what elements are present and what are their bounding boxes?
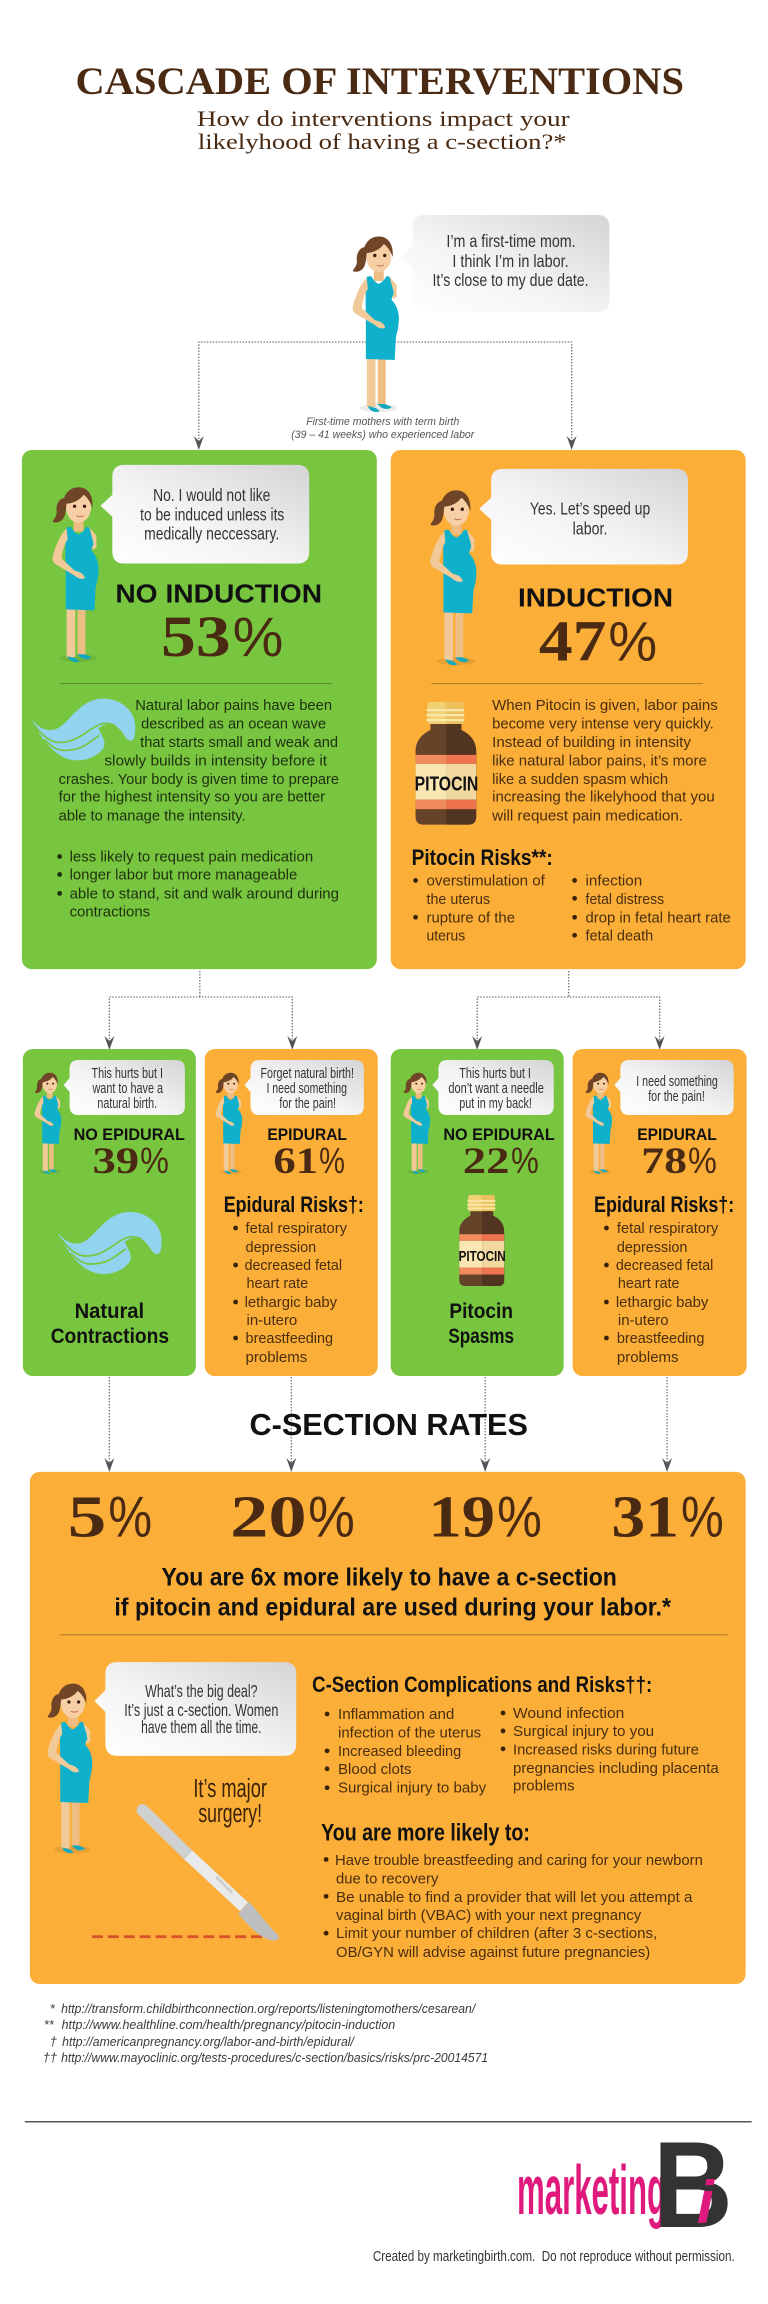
- list: more likely: vaginal birth (VBAC) with your next pregnancy: [336, 1908, 642, 1924]
- speech bubble: first-time mom: It’s close to my due date.: [432, 270, 589, 290]
- key message: You are 6x more likely to have a c-section: [162, 1563, 617, 1591]
- list: no induction benefits: able to stand, sit and walk around during: [70, 886, 339, 902]
- list: epidural risks: Epidural Risks†:: [594, 1192, 734, 1217]
- list: pitocin risks: [413, 873, 731, 945]
- list: more likely: Limit your number of children (after 3 c-sections,: [336, 1926, 657, 1942]
- speech bubble: Forget natural birth!: [260, 1065, 354, 1082]
- woman: [47, 1684, 92, 1853]
- stat: 39%: 39: [92, 1140, 139, 1181]
- woman: no induction: [52, 487, 99, 662]
- list: epidural risks: lethargic baby: [616, 1295, 709, 1311]
- text: natural labor: for the highest intensity so you are better: [59, 790, 325, 806]
- arrows: induction to epidural panels: [472, 971, 665, 1050]
- stat: 31%: %: [681, 1486, 724, 1550]
- speech bubble: first-time mom: I’m a first-time mom.: [446, 231, 576, 251]
- icon: pitocin bottle: [415, 702, 478, 825]
- list: more likely: Have trouble breastfeeding and caring for your newborn: [335, 1853, 703, 1869]
- panel: epidural, pitocin: [573, 1049, 747, 1376]
- stat: 5%: [68, 1484, 152, 1550]
- panel: induction: [391, 450, 746, 969]
- speech bubble: This hurts but I: [459, 1065, 531, 1082]
- list: more likely: OB/GYN will advise against future pregnancies): [336, 1945, 650, 1961]
- speech bubble: natural birth.: [97, 1095, 157, 1112]
- text: natural labor: Natural labor pains have been: [135, 698, 332, 714]
- list: epidural risks: breastfeeding: [617, 1331, 704, 1347]
- footnotes: ††: [43, 2050, 58, 2065]
- woman: [403, 1073, 430, 1174]
- heading: pitocin risks: Pitocin Risks**:: [412, 845, 553, 870]
- stat: 20%: [230, 1484, 355, 1550]
- list: complications right: pregnancies including placenta: [513, 1761, 720, 1777]
- footnotes: http://www.healthline.com/health/pregnancy/pitocin-induction: [62, 2017, 395, 2032]
- list: epidural risks: breastfeeding: [246, 1331, 333, 1347]
- text: natural labor: that starts small and weak and: [140, 735, 338, 751]
- list: epidural risks: decreased fetal: [245, 1258, 342, 1274]
- list: no induction benefits: longer labor but more manageable: [70, 867, 297, 883]
- speech bubble: I need something: [266, 1080, 347, 1097]
- stat: 61%: %: [319, 1141, 345, 1181]
- footnotes: †: [50, 2034, 58, 2049]
- caption: (39 – 41 weeks) who experienced labor: [291, 429, 476, 441]
- stat: 78%: [641, 1140, 717, 1181]
- list: more likely: [324, 1853, 703, 1961]
- woman: [216, 1073, 242, 1174]
- list: epidural risks: decreased fetal: [616, 1258, 713, 1274]
- stat: 31%: 31: [611, 1484, 679, 1550]
- speech bubble: [432, 1060, 554, 1115]
- list: complications right: Wound infection: [513, 1706, 624, 1722]
- speech bubble: no induction: [100, 465, 309, 564]
- list: epidural risks: problems: [246, 1350, 307, 1366]
- panel: c-section outcomes: [30, 1472, 746, 1984]
- text: natural labor: slowly builds in intensity before it: [104, 753, 327, 769]
- list: complications left: Blood clots: [338, 1762, 412, 1778]
- list: pitocin risks: uterus: [427, 929, 465, 945]
- list: epidural risks: problems: [617, 1350, 679, 1366]
- stat: 47%: 47: [539, 611, 606, 674]
- list: pitocin risks: fetal death: [586, 929, 653, 945]
- speech bubble: for the pain!: [648, 1088, 705, 1105]
- text: pitocin: become very intense very quickly.: [492, 717, 714, 733]
- list: epidural risks: fetal respiratory: [246, 1221, 348, 1237]
- icon: wave: [58, 1212, 162, 1274]
- callout: major surgery: [193, 1775, 267, 1828]
- panel: no induction: [22, 450, 377, 969]
- stat: 19%: %: [497, 1486, 542, 1550]
- heading: induction: INDUCTION: [518, 584, 673, 612]
- text: pitocin: increasing the likelyhood that you: [492, 790, 715, 806]
- speech bubble: for the pain!: [279, 1095, 336, 1112]
- list: pitocin risks: infection: [586, 873, 642, 889]
- stat: 78%: 78: [641, 1140, 687, 1181]
- label: EPIDURAL: [267, 1126, 347, 1144]
- footnotes: [43, 2001, 488, 2065]
- list: complications right: problems: [513, 1779, 575, 1795]
- list: epidural risks: fetal respiratory: [617, 1221, 719, 1237]
- list: complications left: Surgical injury to baby: [338, 1781, 487, 1797]
- callout: major surgery: It’s major: [193, 1775, 267, 1803]
- stat: 5%: 5: [68, 1484, 106, 1550]
- speech bubble: induction: [479, 469, 688, 565]
- footnotes: http://transform.childbirthconnection.org/reports/listeningtomothers/cesarean/: [61, 2001, 477, 2016]
- list: epidural risks: in-utero: [618, 1313, 669, 1329]
- logo: marketingBi: i: [697, 2169, 715, 2236]
- stat: 19%: [428, 1484, 542, 1550]
- text: pitocin: When Pitocin is given, labor pains: [492, 698, 718, 714]
- speech bubble: first-time mom: [401, 215, 609, 312]
- caption: pitocin spasms: Spasms: [448, 1325, 514, 1348]
- stat: 31%: [611, 1484, 724, 1550]
- text: pitocin: [491, 698, 718, 825]
- icon: pitocin bottle: PITOCIN: [459, 1249, 506, 1265]
- list: pitocin risks: fetal distress: [586, 892, 664, 908]
- list: more likely: Be unable to find a provider that will let you attempt a: [336, 1890, 693, 1906]
- list: epidural risks: depression: [617, 1240, 687, 1256]
- stat: 53%: %: [233, 606, 283, 668]
- list: pitocin risks: rupture of the: [427, 910, 515, 926]
- arrows: no induction to epidural panels: [104, 971, 297, 1050]
- stat: 47%: %: [608, 611, 657, 673]
- stat: 20%: 20: [230, 1484, 307, 1550]
- speech bubble: induction: Yes. Let’s speed up: [530, 499, 650, 519]
- speech bubble: have them all the time.: [141, 1717, 261, 1737]
- list: complications right: Surgical injury to you: [513, 1724, 654, 1740]
- panel: no epidural, natural: [23, 1049, 196, 1376]
- stat: 5%: %: [108, 1486, 152, 1550]
- woman: [35, 1073, 61, 1174]
- text: pitocin: like natural labor pains, it’s more: [492, 753, 707, 769]
- icon: pitocin bottle: [459, 1195, 506, 1286]
- list: complications left: infection of the uterus: [338, 1725, 481, 1742]
- speech bubble: no induction: medically neccessary.: [144, 524, 279, 544]
- callout: major surgery: surgery!: [198, 1800, 262, 1828]
- footnotes: http://americanpregnancy.org/labor-and-birth/epidural/: [62, 2034, 355, 2049]
- list: no induction benefits: contractions: [70, 904, 150, 920]
- list: pitocin risks: drop in fetal heart rate: [586, 910, 731, 926]
- list: complications left: [325, 1707, 487, 1797]
- caption: pitocin spasms: [448, 1300, 514, 1348]
- footnotes: **: [44, 2017, 55, 2032]
- stat: 61%: [273, 1140, 345, 1181]
- speech bubble: [64, 1060, 185, 1115]
- stat: 47%: [539, 611, 657, 674]
- caption: natural contractions: Contractions: [51, 1325, 169, 1348]
- heading: c-section rates: C-SECTION RATES: [250, 1407, 528, 1442]
- icon: pitocin bottle: PITOCIN: [415, 774, 478, 796]
- speech bubble: What’s the big deal?: [145, 1681, 258, 1701]
- list: epidural risks: [594, 1192, 734, 1366]
- panel: no epidural, pitocin: [391, 1049, 564, 1376]
- list: more likely: due to recovery: [336, 1871, 439, 1887]
- speech bubble: don’t want a needle: [448, 1080, 544, 1097]
- speech bubble: want to have a: [92, 1080, 164, 1097]
- stat: 53%: [161, 606, 283, 669]
- subtitle: [197, 106, 571, 154]
- top branching arrows: [194, 342, 577, 450]
- heading: complications: C-Section Complications and Risks††:: [312, 1672, 652, 1697]
- icon: scalpel and incision: [92, 1810, 279, 1941]
- stat: 53%: 53: [161, 606, 231, 669]
- stat: 78%: %: [688, 1141, 717, 1181]
- speech bubble: put in my back!: [459, 1095, 532, 1112]
- text: natural labor: [59, 698, 339, 825]
- text: pitocin: Instead of building in intensity: [492, 735, 692, 751]
- stat: 19%: 19: [428, 1484, 495, 1550]
- list: complications right: Increased risks during future: [513, 1742, 699, 1758]
- heading: no induction: NO INDUCTION: [115, 580, 322, 608]
- speech bubble: I need something: [636, 1073, 718, 1090]
- label: NO EPIDURAL: [74, 1126, 185, 1144]
- caption: [291, 416, 476, 441]
- speech bubble: This hurts but I: [91, 1065, 163, 1082]
- caption: First-time mothers with term birth: [306, 416, 459, 428]
- stat: 22%: %: [511, 1141, 539, 1181]
- list: epidural risks: [224, 1192, 364, 1366]
- speech bubble: induction: labor.: [573, 519, 607, 539]
- list: complications left: Inflammation and: [338, 1707, 454, 1723]
- list: epidural risks: heart rate: [247, 1276, 308, 1292]
- woman: induction: [430, 490, 476, 665]
- list: complications left: Increased bleeding: [338, 1744, 461, 1760]
- label: EPIDURAL: [637, 1126, 717, 1144]
- panel: epidural, natural: [205, 1049, 378, 1376]
- stat: 39%: [92, 1140, 169, 1181]
- subtitle: How do interventions impact your: [197, 106, 571, 131]
- first-time mom figure: [353, 236, 399, 412]
- footnotes: *: [50, 2001, 56, 2016]
- list: no induction benefits: [57, 849, 339, 920]
- list: pitocin risks: the uterus: [427, 892, 490, 908]
- caption: natural contractions: [51, 1300, 169, 1348]
- icon: ocean wave: [32, 699, 135, 760]
- text: natural labor: described as an ocean wave: [141, 717, 326, 733]
- list: epidural risks: depression: [246, 1240, 316, 1256]
- caption: natural contractions: Natural: [75, 1300, 144, 1323]
- logo: marketingBi: B: [653, 2116, 733, 2253]
- list: epidural risks: heart rate: [618, 1276, 680, 1292]
- list: pitocin risks: overstimulation of: [427, 873, 546, 889]
- text: natural labor: crashes. Your body is given time to prepare: [59, 772, 339, 788]
- key message: if pitocin and epidural are used during your labor.*: [114, 1593, 671, 1621]
- speech bubble: [94, 1662, 296, 1756]
- label: NO EPIDURAL: [443, 1126, 555, 1144]
- woman: [585, 1073, 612, 1174]
- speech bubble: first-time mom: I think I’m in labor.: [452, 251, 569, 271]
- stat: 61%: 61: [273, 1140, 318, 1181]
- list: epidural risks: lethargic baby: [245, 1295, 338, 1311]
- stat: 39%: %: [140, 1141, 169, 1181]
- key message: [114, 1563, 671, 1621]
- title: CASCADE OF INTERVENTIONS: [76, 60, 684, 103]
- speech bubble: no induction: to be induced unless its: [140, 505, 284, 525]
- speech bubble: [614, 1060, 734, 1115]
- list: epidural risks: Epidural Risks†:: [224, 1192, 364, 1217]
- list: complications right: [501, 1706, 720, 1795]
- speech bubble: It’s just a c-section. Women: [124, 1700, 278, 1720]
- arrows: down to c-section rates: [104, 1377, 672, 1472]
- caption: pitocin spasms: Pitocin: [449, 1300, 513, 1323]
- stat: 22%: 22: [463, 1140, 510, 1181]
- heading: more likely: You are more likely to:: [321, 1820, 530, 1847]
- stat: 20%: %: [308, 1486, 355, 1550]
- list: epidural risks: in-utero: [247, 1313, 297, 1329]
- speech bubble: [245, 1060, 364, 1115]
- subtitle: likelyhood of having a c-section?*: [198, 129, 567, 154]
- text: natural labor: able to manage the intensity.: [59, 809, 246, 825]
- footnotes: http://www.mayoclinic.org/tests-procedures/c-section/basics/risks/prc-20014571: [61, 2050, 488, 2065]
- logo: marketingBi: [517, 2116, 733, 2253]
- list: no induction benefits: less likely to request pain medication: [70, 849, 313, 865]
- text: pitocin: will request pain medication.: [491, 809, 683, 825]
- stat: 22%: [463, 1140, 539, 1181]
- text: pitocin: like a sudden spasm which: [492, 772, 668, 788]
- speech bubble: no induction: No. I would not like: [153, 485, 270, 505]
